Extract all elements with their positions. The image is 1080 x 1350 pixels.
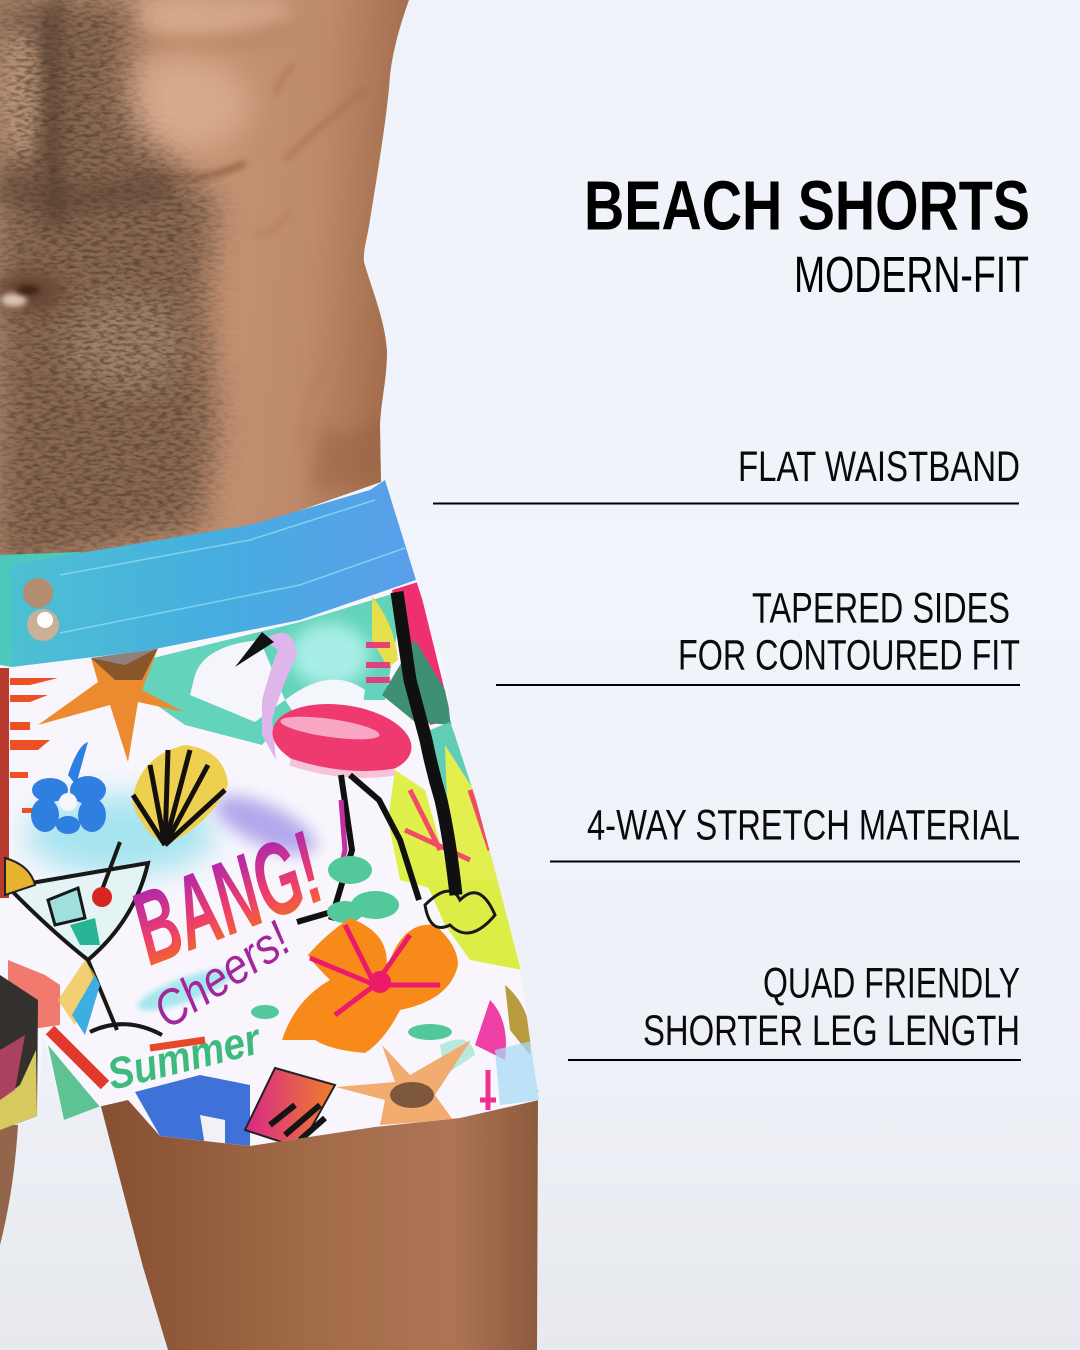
left leg: [0, 1125, 18, 1245]
pocket graphic: [392, 582, 452, 725]
feature: tapered sides: [496, 584, 1020, 686]
lower print: palm and signs: [135, 1075, 250, 1146]
scribble script: [425, 891, 495, 933]
upper shadow and muscle shading: [130, 0, 290, 39]
zipper: [397, 592, 456, 895]
rear leg panel: [0, 975, 38, 1130]
bottom-right motif: [440, 985, 540, 1110]
torso: [0, 0, 409, 570]
navel: [0, 272, 64, 312]
buttons: [23, 578, 59, 641]
icon: orange hibiscus: [282, 918, 458, 1053]
red stripes at fly: [10, 678, 58, 813]
print text: BANG!: BANG!: [117, 810, 337, 987]
green leaves: [251, 856, 452, 1040]
starfish bottom: [336, 1040, 471, 1125]
heading block: [584, 166, 1030, 303]
lemon slice: [5, 858, 35, 895]
feature: quad friendly: [568, 960, 1021, 1061]
left inner print: [8, 960, 60, 1030]
icon: starfish top: [38, 648, 184, 762]
print text: Cheers!: Cheers!: [143, 911, 300, 1039]
icon: shell: [132, 745, 228, 845]
waistband: [0, 480, 416, 667]
print wash patches: [135, 590, 405, 745]
print text: Summer: Summer: [103, 1014, 267, 1100]
shorts fabric: [0, 580, 539, 1146]
icon: blue hibiscus: [31, 742, 106, 834]
hair base: [0, 0, 215, 570]
hair texture: [0, 0, 215, 570]
photo: model wearing beach shorts: [0, 0, 540, 1350]
icon: flamingo: [235, 632, 419, 922]
shorts: [0, 580, 540, 1148]
martini glass: [8, 842, 162, 1035]
right leg: [98, 1090, 538, 1350]
